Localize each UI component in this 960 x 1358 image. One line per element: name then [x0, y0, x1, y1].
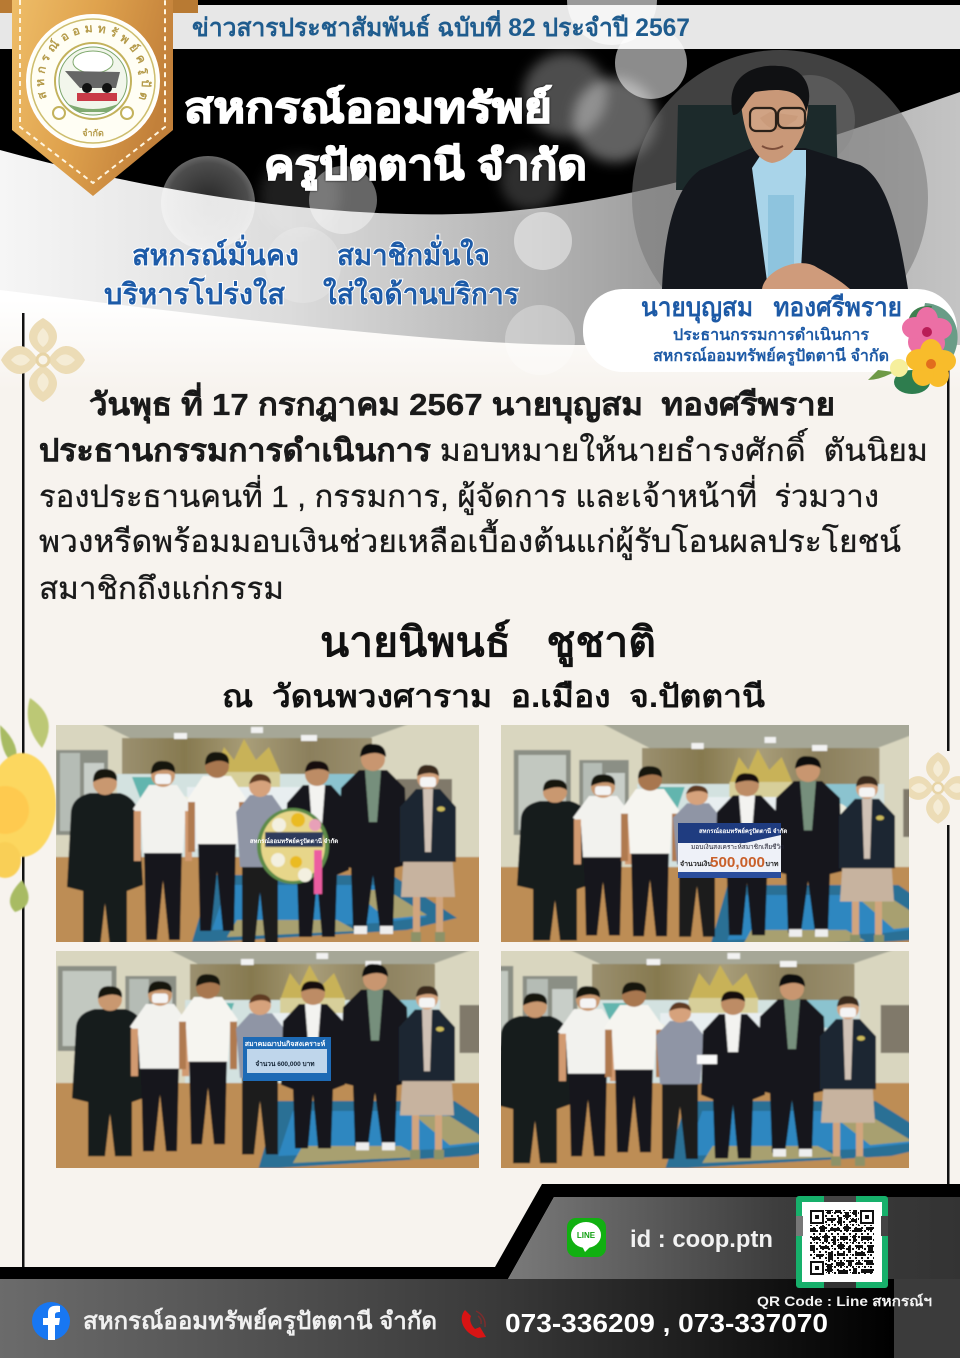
body paragraph: ประธานกรรมการดำเนินการ มอบหมายให้นายธำรงศักดิ์ ตันนิยม [39, 427, 928, 468]
flower decoration: top right [868, 303, 958, 394]
name plate: ประธานกรรมการดำเนินการ [673, 326, 869, 344]
photo 3: blue placard: สมาคมฌาปนกิจสงเคราะห์ [245, 1039, 326, 1048]
icon: LINE: LINE [577, 1231, 596, 1240]
bottom black frame [0, 1184, 960, 1279]
photo 1: wreath presentation [56, 725, 479, 942]
slogan [104, 234, 519, 311]
body paragraph: รองประธานคนที่ 1 , กรรมการ, ผู้จัดการ และเจ้าหน้าที่ ร่วมวาง [39, 475, 879, 515]
slogan: ใส่ใจด้านบริการ [323, 277, 519, 311]
header band: black and gray swoosh [0, 0, 960, 390]
name plate [583, 289, 957, 372]
photo 4: envelope handover [501, 951, 909, 1168]
chairman portrait [632, 50, 928, 289]
deceased member name: นายนิพนธ์ ชูชาติ [320, 619, 656, 668]
icon: Facebook [32, 1302, 70, 1340]
photo 2: 500,000 baht placard: มอบเงินสงเคราะห์สมาชิกเสียชีวิต [691, 843, 784, 851]
main title: สหกรณ์ออมทรัพย์ [184, 85, 552, 131]
photo 3: blue placard: จำนวน 600,000 บาท [255, 1060, 315, 1068]
icon: phone [462, 1310, 486, 1338]
line id: id : coop.ptn [630, 1226, 773, 1253]
facebook page name: สหกรณ์ออมทรัพย์ครูปัตตานี จำกัด [83, 1307, 437, 1336]
flower decoration: left side [0, 698, 56, 912]
body paragraph [39, 382, 928, 606]
ornament left [1, 318, 85, 402]
name plate: สหกรณ์ออมทรัพย์ครูปัตตานี จำกัด [653, 346, 889, 367]
photo 2: 500,000 baht placard: จำนวนเงิน [680, 860, 712, 868]
body paragraph: วันพุธ ที่ 17 กรกฎาคม 2567 นายบุญสม ทองศรีพราย [89, 382, 835, 424]
ornament right [902, 752, 960, 824]
slogan: บริหารโปร่งใส [104, 276, 285, 311]
logo seal [26, 14, 160, 148]
name plate: นายบุญสม ทองศรีพราย [641, 292, 902, 324]
ceremony venue: ณ วัดนพวงศาราม อ.เมือง จ.ปัตตานี [222, 679, 765, 714]
body paragraph: พวงหรีดพร้อมมอบเงินช่วยเหลือเบื้องต้นแก่ผู้รับโอนผลประโยชน์ [39, 519, 901, 560]
ribbon with logo [0, 0, 198, 196]
logo seal: จำกัด [82, 128, 104, 138]
photo 2: 500,000 baht placard [501, 725, 909, 942]
photo 2: 500,000 baht placard: สหกรณ์ออมทรัพย์ครูปัตตานี จำกัด [699, 827, 787, 836]
main title [184, 85, 587, 191]
phone numbers: 073-336209 , 073-337070 [505, 1308, 828, 1338]
frame lines [22, 313, 950, 1268]
photo 2: 500,000 baht placard: บาท [766, 861, 779, 868]
slogan: สหกรณ์มั่นคง [132, 234, 299, 272]
slogan: สมาชิกมั่นใจ [337, 234, 490, 272]
photo 3: blue placard [56, 951, 479, 1168]
icon: LINE [567, 1218, 606, 1257]
photo 1: wreath presentation: สหกรณ์ออมทรัพย์ครูปัตตานี จำกัด [250, 837, 338, 846]
issue line: ข่าวสารประชาสัมพันธ์ ฉบับที่ 82 ประจำปี 2567 [192, 10, 690, 42]
decorative bokeh circles [161, 0, 687, 375]
QR code [796, 1196, 888, 1288]
QR caption: QR Code : Line สหกรณ์ฯ [757, 1293, 932, 1309]
main title: ครูปัตตานี จำกัด [264, 142, 587, 191]
photo 2: 500,000 baht placard: 500,000 [710, 854, 765, 871]
body paragraph: สมาชิกถึงแก่กรรม [39, 571, 284, 606]
social panel [508, 1197, 960, 1279]
footer bar [0, 1279, 960, 1358]
